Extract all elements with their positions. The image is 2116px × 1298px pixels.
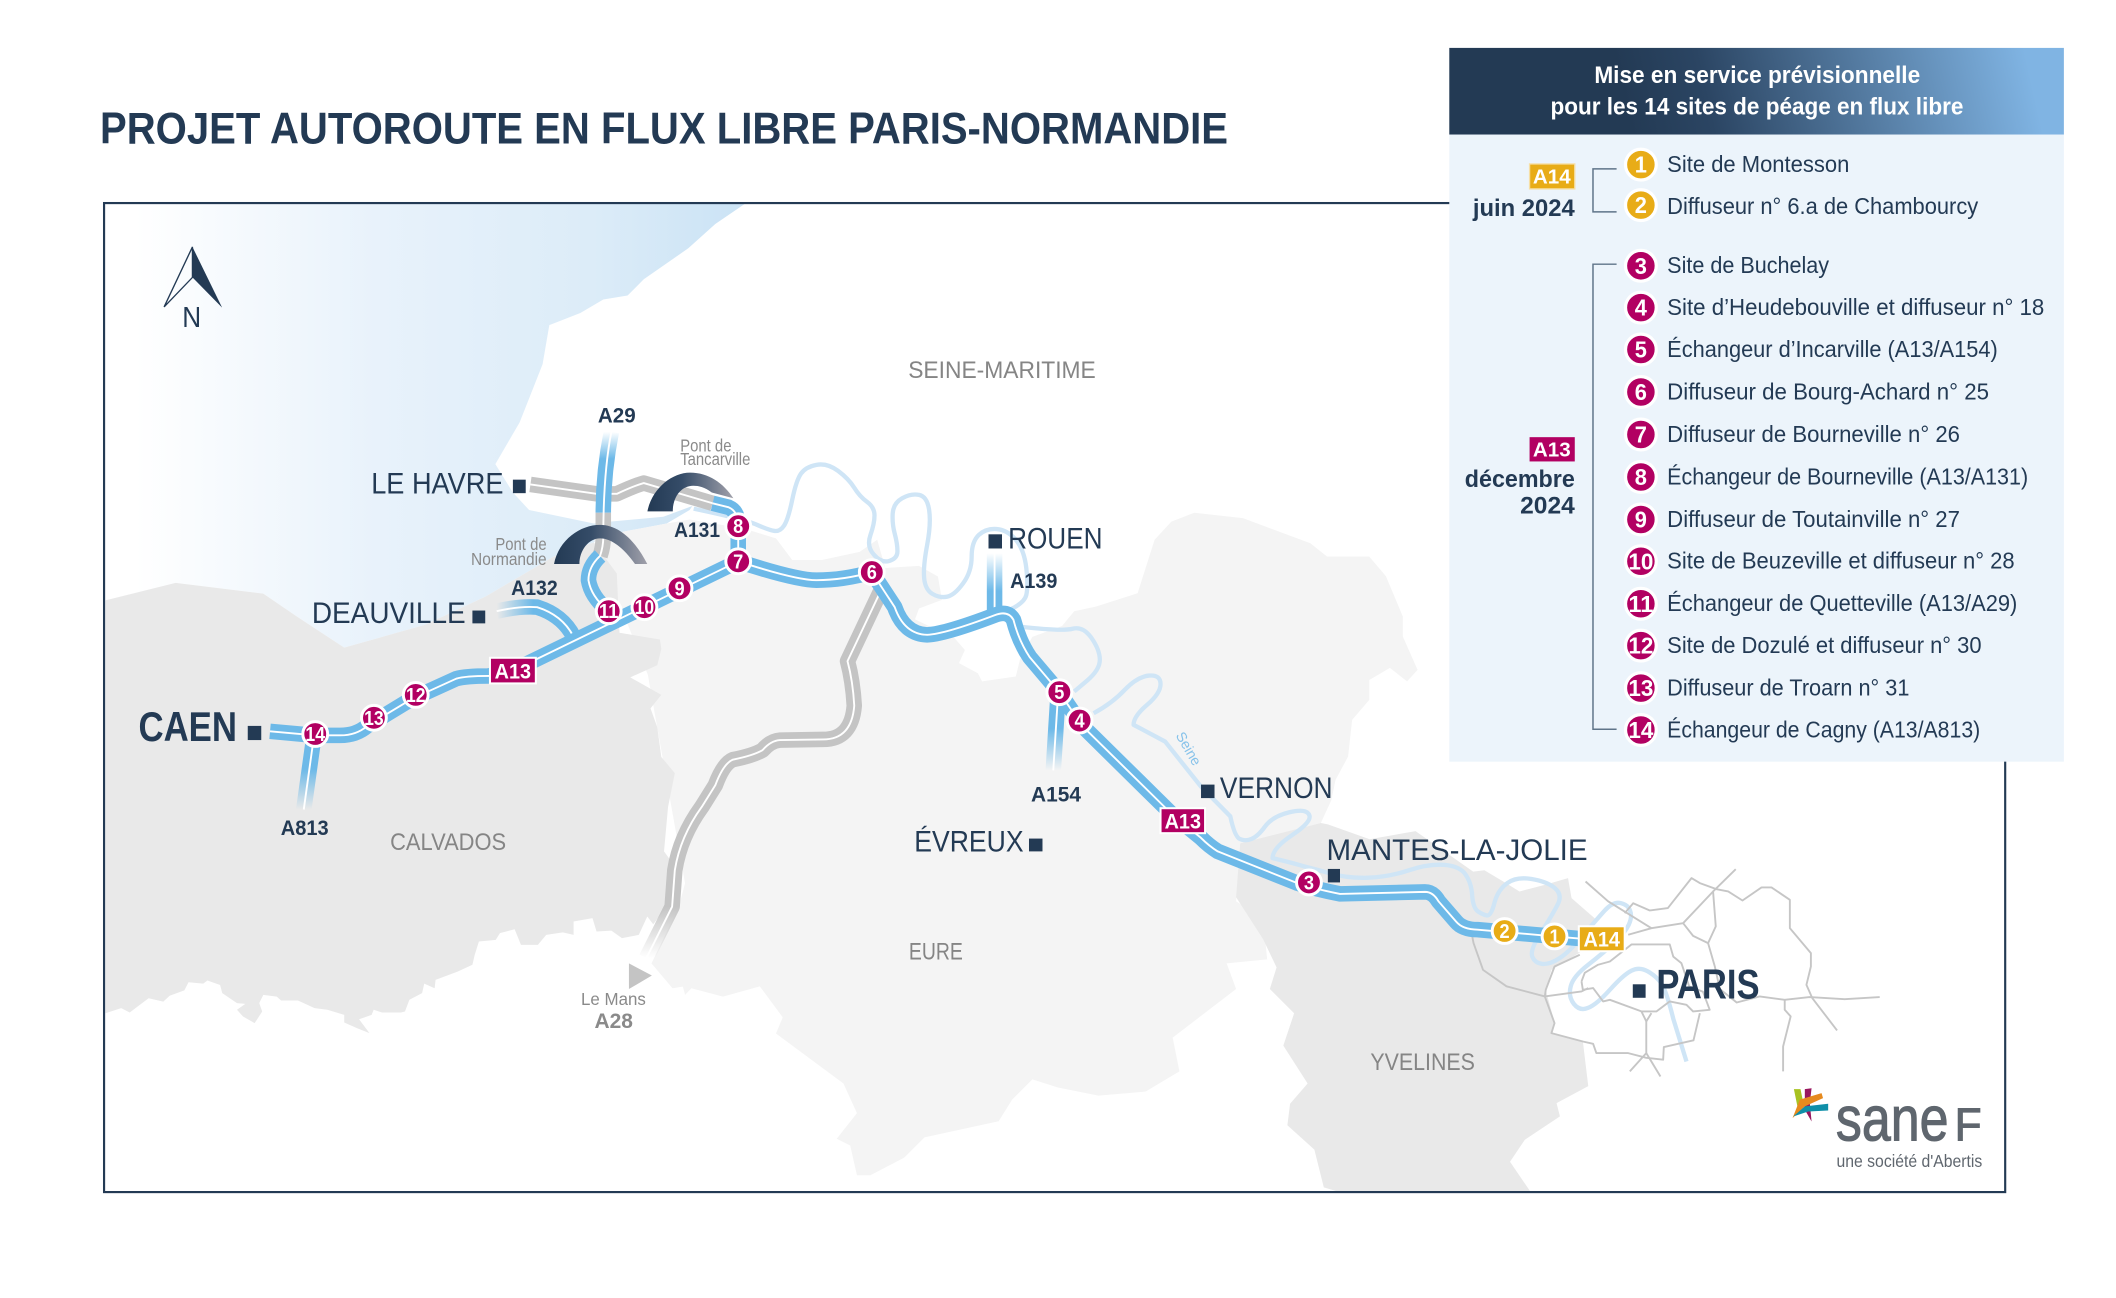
legend item 9: Diffuseur de Toutainville n° 27 — [1667, 506, 1960, 532]
label: Pont de Normandie: Normandie — [471, 549, 547, 569]
road: A13 and A14 — [270, 561, 1602, 940]
road: A139 — [989, 553, 1000, 615]
map markers: 7 — [733, 551, 743, 573]
icon: direction arrow to Le Mans — [629, 963, 652, 989]
legend header — [1449, 48, 2064, 135]
legend item 2: 2 — [1635, 192, 1647, 218]
period: A14 juin 2024 — [1472, 164, 1575, 222]
city: Deauville: DEAUVILLE — [312, 597, 466, 630]
Paris road network — [1472, 869, 1880, 1076]
map markers: 3 — [1304, 872, 1314, 894]
legend item 8: 8 — [1635, 464, 1647, 490]
label: Le Mans A28: Le Mans — [581, 989, 646, 1009]
sea and estuary — [105, 204, 745, 648]
bridge: Pont de Normandie — [554, 525, 647, 564]
panel: legend — [1449, 48, 2064, 762]
bridge: Pont de Tancarville — [647, 473, 733, 511]
map markers — [303, 514, 1567, 949]
legend item 13: Diffuseur de Troarn n° 31 — [1667, 675, 1909, 701]
river label: Seine — [1172, 729, 1204, 769]
road labels — [281, 402, 1081, 840]
river Seine — [694, 464, 1686, 1061]
label: Pont de Normandie: Pont de — [495, 534, 547, 554]
legend item 14: 14 — [1628, 717, 1654, 743]
department labels — [390, 357, 1475, 1076]
road labels: A813 — [281, 815, 329, 840]
road: A132 — [497, 607, 574, 637]
legend header: pour les 14 sites de péage en flux libre — [1550, 95, 1963, 121]
map markers: 13 — [364, 708, 384, 730]
legend item 11: Échangeur de Quetteville (A13/A29) — [1667, 590, 2017, 616]
logo: sanef: F — [1955, 1099, 1982, 1151]
title: PROJET AUTOROUTE EN FLUX LIBRE PARIS-NORMANDIE — [100, 105, 1228, 154]
legend item 2: Diffuseur n° 6.a de Chambourcy — [1667, 193, 1979, 219]
road badge: A14: A14 — [1584, 929, 1620, 952]
city: Evreux: ÉVREUX — [914, 825, 1024, 858]
city: Mantes-la-Jolie: MANTES-LA-JOLIE — [1327, 834, 1588, 867]
map markers: 12 — [406, 685, 426, 707]
bracket: A13 — [1593, 264, 1617, 729]
map markers: 2 — [1500, 921, 1510, 943]
department labels: YVELINES — [1370, 1049, 1475, 1076]
icon: north arrow — [164, 247, 222, 334]
legend item 13 — [1626, 673, 1909, 704]
road labels: A131 — [674, 517, 720, 542]
department: Eure — [594, 513, 1418, 1175]
map markers: 11 — [599, 601, 618, 623]
period: A13 décembre 2024: 2024 — [1520, 493, 1575, 519]
map markers: 14 — [305, 724, 326, 746]
legend item 4: Site d’Heudebouville et diffuseur n° 18 — [1667, 294, 2044, 320]
label: Le Mans A28: A28 — [595, 1008, 633, 1033]
legend item 5: 5 — [1635, 337, 1647, 363]
road: A813 — [304, 737, 314, 810]
period: A14 juin 2024: A14 — [1533, 167, 1571, 189]
road: A154 — [1053, 695, 1058, 770]
road: A28 — [646, 587, 883, 958]
label: Pont de Normandie — [471, 534, 547, 569]
legend item 1 — [1626, 149, 1849, 180]
city: Caen: CAEN — [138, 703, 237, 750]
logo: sanef — [1793, 1085, 1982, 1171]
map — [105, 204, 1982, 1191]
legend item 14: Échangeur de Cagny (A13/A813) — [1667, 716, 1980, 742]
legend item 11: 11 — [1628, 591, 1654, 617]
map markers: 6 — [867, 562, 877, 584]
department: Yvelines — [1236, 823, 1596, 1191]
logo: sanef: une société d'Abertis — [1837, 1151, 1982, 1171]
road labels: A132 — [511, 575, 558, 600]
legend item 9: 9 — [1635, 507, 1647, 533]
city: Paris: PARIS — [1656, 960, 1760, 1007]
road labels: A154 — [1031, 781, 1081, 806]
period: A14 juin 2024: juin 2024 — [1472, 196, 1575, 222]
legend item 7: 7 — [1635, 422, 1647, 448]
city: Paris — [1633, 960, 1760, 1007]
map markers: 8 — [733, 516, 743, 538]
road labels: A29 — [598, 402, 636, 427]
label: Pont de Tancarville: Pont de — [680, 436, 731, 456]
legend body — [1449, 134, 2064, 762]
road labels: A139 — [1010, 568, 1057, 593]
legend item 3: Site de Buchelay — [1667, 252, 1830, 278]
map markers: 4 — [1075, 711, 1085, 733]
legend header: Mise en service prévisionnelle — [1594, 63, 1920, 89]
legend item 13: 13 — [1628, 675, 1653, 701]
legend item 5: Échangeur d’Incarville (A13/A154) — [1667, 336, 1998, 362]
legend item 6: 6 — [1635, 379, 1647, 405]
period: A13 décembre 2024: A13 — [1533, 440, 1571, 462]
legend item 1: Site de Montesson — [1667, 151, 1849, 177]
period: A13 décembre 2024: décembre — [1465, 467, 1575, 493]
department labels: EURE — [909, 938, 963, 965]
road: Le Havre to A131 — [530, 483, 713, 503]
logo: sanef: sane — [1836, 1085, 1949, 1155]
legend item 12: Site de Dozulé et diffuseur n° 30 — [1667, 632, 1982, 658]
label: Pont de Tancarville: Tancarville — [680, 449, 750, 469]
city: Mantes-la-Jolie — [1327, 834, 1588, 882]
map markers: 10 — [635, 597, 654, 619]
legend item 12: 12 — [1628, 633, 1653, 659]
road badge: A13 east: A13 — [1165, 810, 1201, 833]
legend item 8: Échangeur de Bourneville (A13/A131) — [1667, 463, 2028, 489]
label: Le Mans A28 — [581, 989, 646, 1033]
legend item 10: Site de Beuzeville et diffuseur n° 28 — [1667, 548, 2015, 574]
map frame — [104, 203, 2005, 1192]
legend item 6: Diffuseur de Bourg-Achard n° 25 — [1667, 378, 1989, 404]
road: A29 — [588, 432, 611, 610]
road badge: A13 west: A13 — [495, 661, 531, 684]
department labels: CALVADOS — [390, 829, 506, 856]
map markers: 5 — [1054, 682, 1064, 704]
road: A131 — [713, 503, 738, 561]
legend item 4: 4 — [1635, 295, 1647, 321]
department labels: SEINE-MARITIME — [908, 357, 1096, 384]
legend item 3: 3 — [1635, 253, 1647, 279]
legend item 3 — [1626, 250, 1830, 281]
city: Rouen: ROUEN — [1008, 522, 1103, 555]
city: Le Havre: LE HAVRE — [371, 467, 503, 500]
legend item 1: 1 — [1635, 152, 1647, 178]
legend item 10: 10 — [1628, 548, 1653, 574]
map markers: 9 — [674, 578, 685, 600]
department: Calvados — [105, 542, 675, 1033]
period: A13 décembre 2024 — [1465, 437, 1575, 519]
legend item 7: Diffuseur de Bourneville n° 26 — [1667, 421, 1960, 447]
bracket: A14 — [1593, 169, 1617, 212]
icon: north arrow: N — [182, 302, 201, 334]
map markers: 1 — [1549, 926, 1560, 948]
city: Vernon: VERNON — [1220, 772, 1333, 805]
label: Pont de Tancarville — [680, 436, 750, 469]
